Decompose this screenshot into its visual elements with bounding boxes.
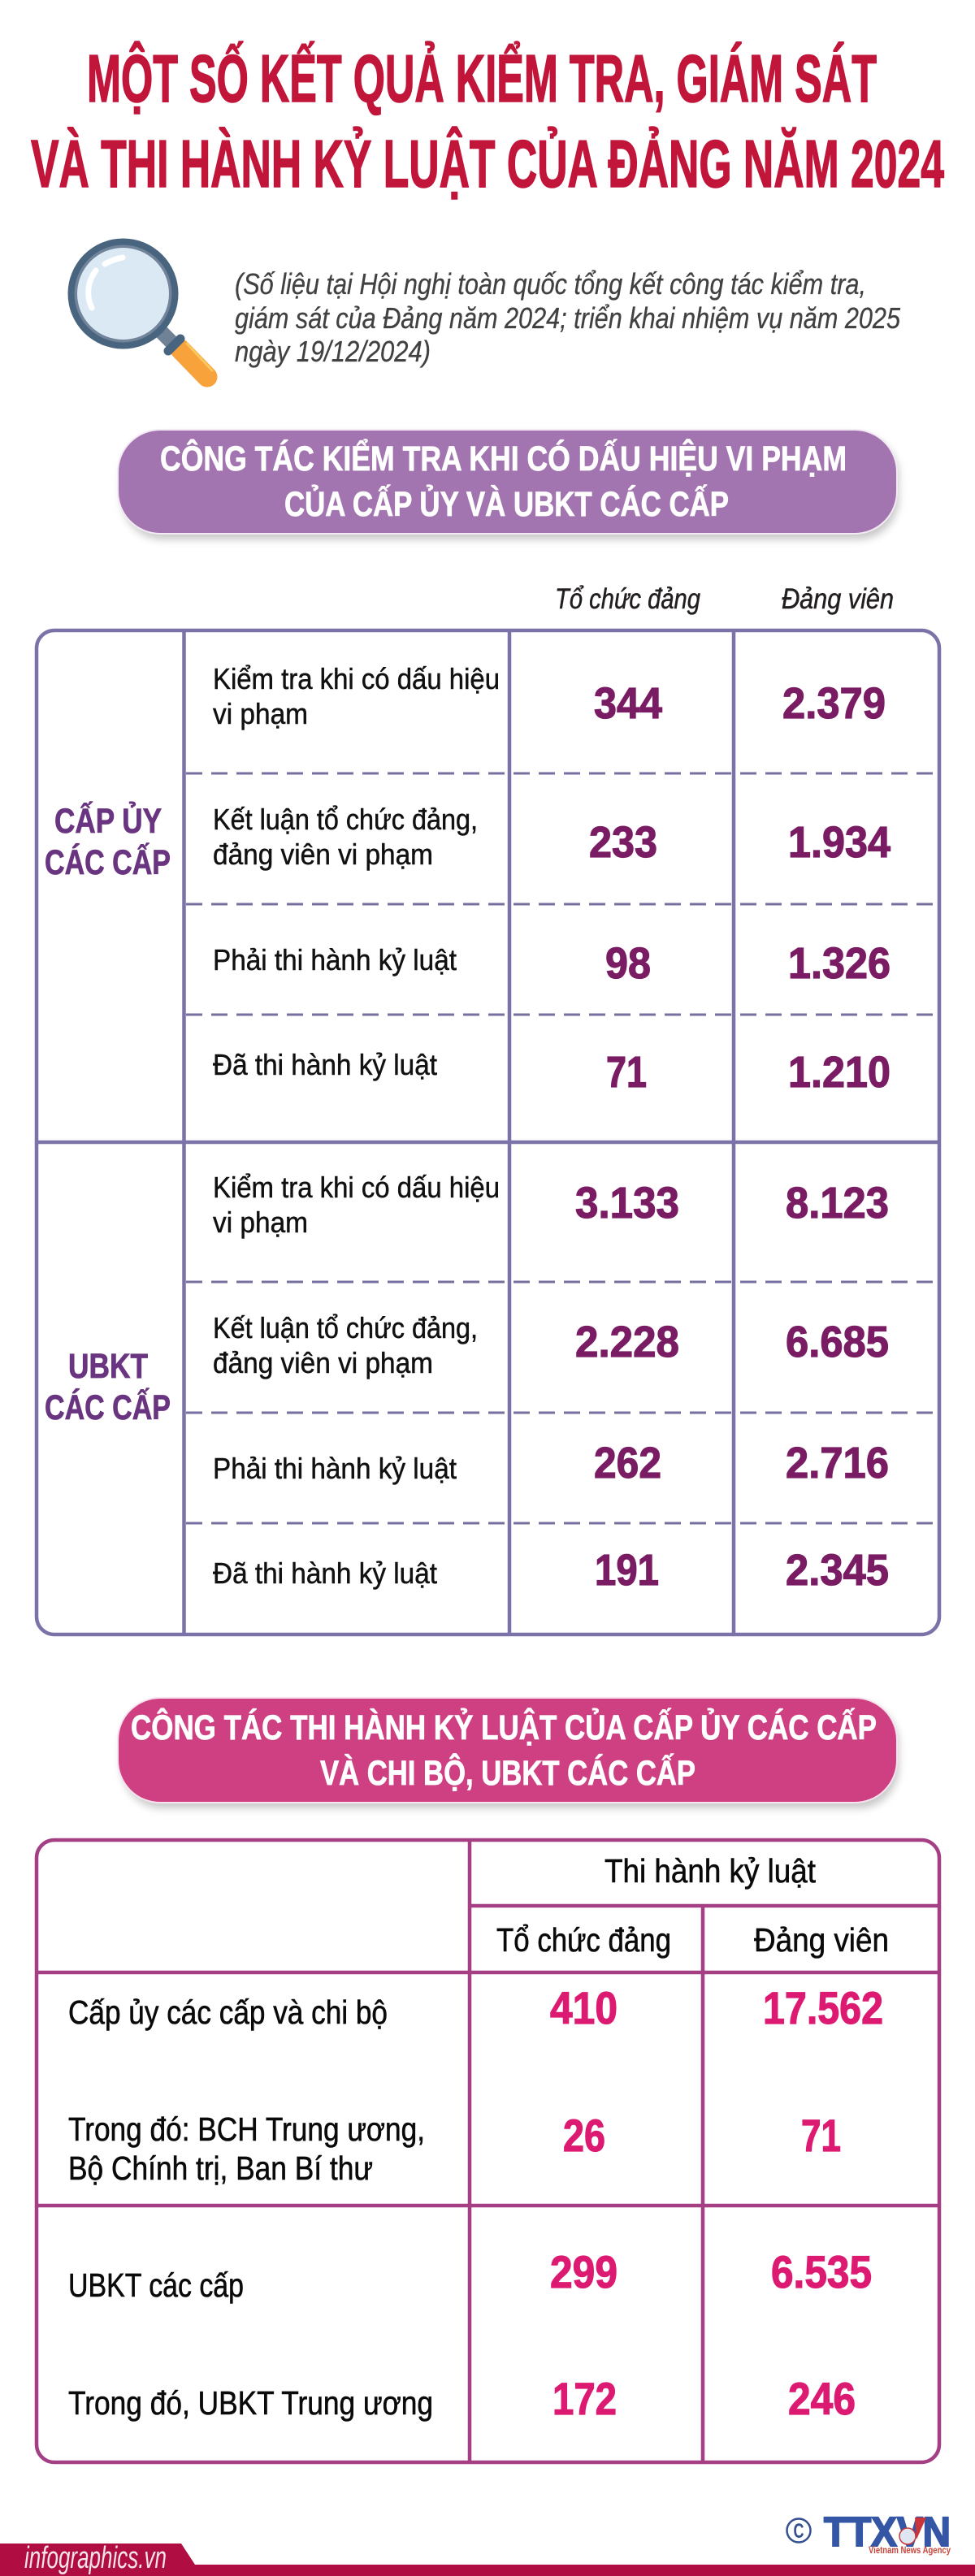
table 2 values: 6.535: [771, 2246, 872, 2297]
table 2 values: 299: [550, 2246, 618, 2297]
column headers: table 1: [555, 583, 894, 615]
table 2 row labels: Bộ Chính trị, Ban Bí thư: [68, 2150, 373, 2187]
table 2 values: 410: [550, 1982, 618, 2033]
values: ubkt: 2.228: [575, 1318, 679, 1366]
logo: TTXVN: TTXVN: [824, 2509, 951, 2555]
logo: TTXVN: Vietnam News Agency: [869, 2544, 951, 2556]
row labels: cấp ủy: Phải thi hành kỷ luật: [213, 943, 457, 976]
values: cấp ủy: 1.210: [788, 1048, 890, 1097]
group label: cấp ủy: CÁC CẤP: [45, 843, 171, 882]
source note: [235, 267, 901, 368]
group label: ubkt: [45, 1347, 171, 1427]
group label: cấp ủy: CẤP ỦY: [54, 801, 162, 841]
values: ubkt: 3.133: [575, 1179, 679, 1227]
row labels: ubkt: đảng viên vi phạm: [213, 1346, 433, 1379]
row labels: cấp ủy: vi phạm: [213, 697, 308, 730]
values: ubkt: 8.123: [786, 1179, 889, 1227]
table 2 values: 246: [788, 2373, 856, 2424]
table 2 header: Đảng viên: [754, 1921, 889, 1959]
table 2 row labels: UBKT các cấp: [68, 2266, 244, 2304]
values: ubkt: 2.345: [786, 1546, 889, 1595]
table 2 row labels: Trong đó: BCH Trung ương,: [68, 2111, 425, 2148]
values: cấp ủy: 2.379: [782, 679, 886, 728]
footer band: infographics.vn: [24, 2541, 167, 2575]
heading: section 2 pill: VÀ CHI BỘ, UBKT CÁC CẤP: [320, 1753, 696, 1793]
column headers: table 1: Đảng viên: [782, 583, 894, 615]
values: ubkt: 6.685: [786, 1318, 889, 1366]
heading: section 2 pill: [118, 1698, 899, 1808]
values: cấp ủy: 71: [606, 1048, 647, 1097]
row labels: cấp ủy: [213, 662, 500, 1081]
source note: (Số liệu tại Hội nghị toàn quốc tổng kết công tác kiểm tra,: [235, 267, 866, 301]
values: cấp ủy: 344: [594, 679, 662, 728]
group label: cấp ủy: [45, 801, 171, 882]
row labels: cấp ủy: đảng viên vi phạm: [213, 838, 433, 871]
group label: ubkt: CÁC CẤP: [45, 1388, 171, 1427]
row labels: ubkt: vi phạm: [213, 1206, 308, 1239]
table 2 values: 26: [563, 2110, 605, 2161]
column headers: table 1: Tổ chức đảng: [555, 583, 700, 615]
heading: section 1 pill: CÔNG TÁC KIỂM TRA KHI CÓ DẤU HIỆU VI PHẠM: [160, 439, 847, 478]
row labels: ubkt: Đã thi hành kỷ luật: [213, 1556, 437, 1590]
table 2 values: 17.562: [763, 1982, 883, 2033]
row labels: cấp ủy: Đã thi hành kỷ luật: [213, 1048, 437, 1081]
logo: TTXVN: C: [793, 2520, 804, 2543]
table 2 row labels: Trong đó, UBKT Trung ương: [68, 2384, 433, 2422]
icon: magnifying glass: [68, 239, 212, 377]
panel: table 1: [37, 630, 939, 1634]
row labels: ubkt: Kết luận tổ chức đảng,: [213, 1311, 478, 1344]
values: cấp ủy: 1.326: [788, 939, 890, 988]
footer band: [0, 2541, 975, 2576]
table 2 values: 71: [801, 2110, 841, 2161]
values: ubkt: [575, 1179, 889, 1595]
values: cấp ủy: 233: [589, 818, 657, 867]
table 2 values: 172: [552, 2373, 617, 2424]
source note: ngày 19/12/2024): [235, 335, 431, 368]
panel: table 2: [37, 1840, 939, 2462]
table 2 values: [550, 1982, 883, 2424]
values: ubkt: 2.716: [786, 1439, 889, 1487]
title: [31, 40, 944, 201]
values: ubkt: 262: [594, 1439, 661, 1487]
heading: section 1 pill: CỦA CẤP ỦY VÀ UBKT CÁC CẤP: [284, 484, 729, 524]
row labels: ubkt: [213, 1171, 500, 1590]
values: cấp ủy: 98: [605, 939, 651, 988]
row labels: cấp ủy: Kiểm tra khi có dấu hiệu: [213, 662, 500, 695]
values: cấp ủy: [589, 679, 890, 1097]
row labels: cấp ủy: Kết luận tổ chức đảng,: [213, 803, 478, 836]
row labels: ubkt: Phải thi hành kỷ luật: [213, 1452, 457, 1485]
table 2 header: Thi hành kỷ luật: [604, 1852, 817, 1890]
table 2 header: [496, 1852, 889, 1959]
values: cấp ủy: 1.934: [788, 818, 890, 867]
heading: section 1 pill: [118, 430, 899, 539]
table 2 header: Tổ chức đảng: [496, 1921, 671, 1959]
row labels: ubkt: Kiểm tra khi có dấu hiệu: [213, 1171, 500, 1204]
group label: ubkt: UBKT: [68, 1347, 148, 1386]
table 2 row labels: [68, 1994, 433, 2422]
table 2 row labels: Cấp ủy các cấp và chi bộ: [68, 1994, 388, 2031]
values: ubkt: 191: [595, 1546, 659, 1595]
